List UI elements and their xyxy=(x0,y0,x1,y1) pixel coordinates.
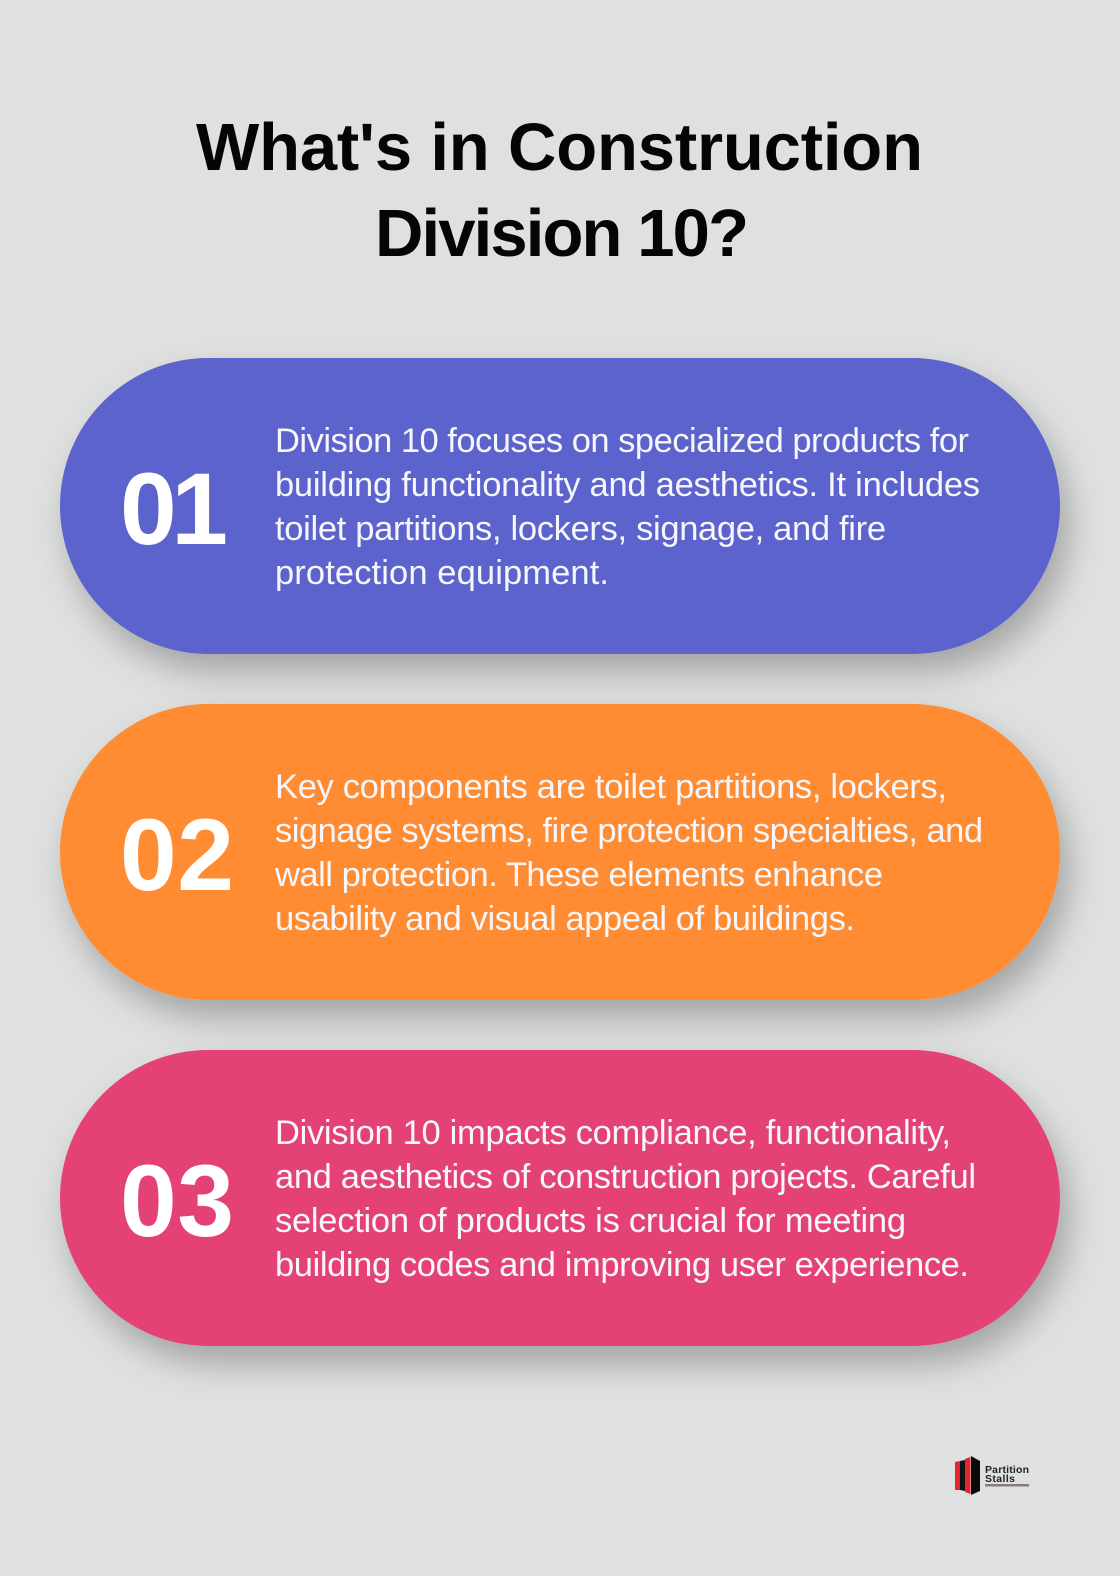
logo wordmark: Stalls xyxy=(985,1473,1015,1485)
text block 03 xyxy=(275,1114,976,1284)
title: Division 10? xyxy=(375,196,749,271)
text block 02: Key components are toilet partitions, lockers, xyxy=(275,768,947,806)
icon: logo bars xyxy=(955,1456,980,1495)
text block 02: wall protection. These elements enhance xyxy=(274,856,883,894)
text block 02 xyxy=(274,768,983,938)
text block 01 xyxy=(275,422,980,592)
logo wordmark: Partition xyxy=(985,1464,1029,1476)
panel: item 03 xyxy=(60,1050,1060,1346)
text block 03: and aesthetics of construction projects. Careful xyxy=(275,1158,976,1196)
text block 02: usability and visual appeal of buildings. xyxy=(275,900,855,938)
text block 03: Division 10 impacts compliance, functionality, xyxy=(275,1114,951,1152)
text block 03: building codes and improving user experience. xyxy=(275,1246,969,1284)
number 03: 03 xyxy=(120,1144,234,1258)
logo: Partition Stalls xyxy=(955,1456,1029,1495)
text block 01: building functionality and aesthetics. It includes xyxy=(275,466,980,504)
text block 01: toilet partitions, lockers, signage, and fire xyxy=(275,510,886,548)
title xyxy=(196,110,923,271)
text block 02: signage systems, fire protection specialties, and xyxy=(275,812,983,850)
number 02: 02 xyxy=(120,798,234,912)
panel: item 02 xyxy=(60,704,1060,1000)
text block 03: selection of products is crucial for meeting xyxy=(275,1202,906,1240)
panel: item 01 xyxy=(60,358,1060,654)
text block 01: protection equipment. xyxy=(275,554,609,592)
title: What's in Construction xyxy=(196,110,923,185)
text block 01: Division 10 focuses on specialized products for xyxy=(275,422,969,460)
number 01: 01 xyxy=(120,452,228,566)
logo wordmark xyxy=(985,1464,1029,1486)
